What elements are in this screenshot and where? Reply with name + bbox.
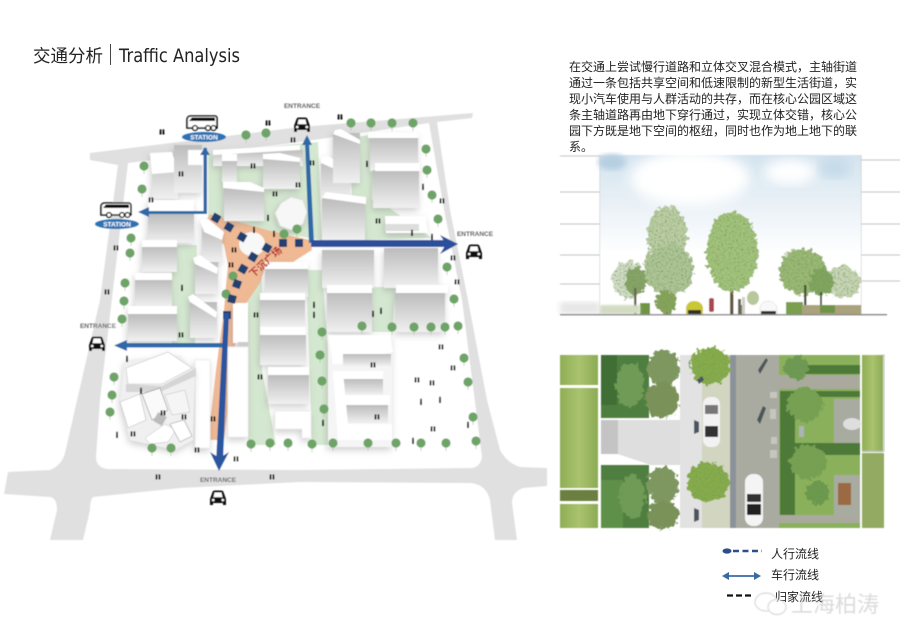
- text block: description: 条主轴道路再由地下穿行通过，实现立体交错，核心公: [569, 107, 857, 122]
- text block: description: 通过一条包括共享空间和低速限制的新型生活街道，实: [569, 75, 857, 90]
- section side buildings: [560, 155, 900, 314]
- sunken plaza: [204, 214, 312, 440]
- entrance: east: [457, 231, 494, 259]
- courtyard block: [328, 335, 393, 447]
- plan cars: [694, 358, 777, 526]
- plan garden right: [779, 355, 861, 528]
- entrance: north: [284, 103, 321, 132]
- pedestrian route squares: [211, 213, 303, 319]
- title: [33, 44, 240, 67]
- text block: description: 系。: [569, 140, 593, 154]
- plan driveway and road: [601, 355, 779, 528]
- section trees: [612, 206, 860, 314]
- red label: sunken plaza: 下沉广场: [246, 244, 285, 280]
- bus and station marker: north: [182, 116, 226, 142]
- trees: [105, 118, 481, 456]
- section sky: [598, 150, 861, 314]
- bus and station marker: west: STATION: [103, 222, 131, 228]
- building blocks: [128, 129, 448, 448]
- title: 交通分析: [33, 46, 103, 66]
- panel: street plan: [560, 347, 884, 529]
- panel: site traffic map: [4, 103, 547, 540]
- bus and station marker: west: [95, 203, 139, 229]
- arrow: west entrance route: [114, 340, 225, 351]
- plan street trees: [687, 347, 730, 502]
- legend: pedestrian route: 人行流线: [771, 547, 819, 561]
- watermark: 上海柏涛: [791, 592, 879, 617]
- text block: description: 现小汽车使用与人群活动的共存，而在核心公园区域这: [569, 91, 857, 106]
- entrance: north: ENTRANCE: [284, 103, 321, 110]
- legend: [722, 547, 823, 604]
- plan lawns left: [560, 355, 598, 528]
- organic landmark building: [120, 352, 196, 450]
- entrance: south: [200, 477, 237, 505]
- people: [105, 114, 469, 479]
- text block: description: 园下方既是地下空间的枢纽，同时也作为地上地下的联: [569, 123, 857, 138]
- plan lawns right: [862, 355, 884, 528]
- panel: street section: [560, 150, 900, 315]
- bus and station marker: north: STATION: [190, 134, 218, 142]
- arrow: north-west vehicle route to stations: [138, 147, 210, 217]
- arrow: east entrance route: [311, 235, 458, 254]
- entrance: west: [80, 323, 117, 351]
- green spaces: [170, 134, 432, 445]
- section street objects: [560, 291, 887, 315]
- arrow: north entrance route: [302, 135, 314, 243]
- road network: [4, 113, 547, 540]
- text block: description: 在交通上尝试慢行道路和立体交叉混合模式，主轴街道: [569, 59, 857, 74]
- arrow: south entrance route: [210, 313, 229, 471]
- entrance: west: ENTRANCE: [80, 323, 117, 330]
- title: Traffic Analysis: [118, 46, 240, 67]
- legend: homecoming route: 归家流线: [775, 589, 823, 604]
- plan planting left: [601, 350, 679, 529]
- site ground: [96, 123, 482, 470]
- legend: vehicle route: 车行流线: [771, 567, 819, 582]
- entrance: east: ENTRANCE: [457, 231, 494, 238]
- entrance: south: ENTRANCE: [200, 477, 237, 484]
